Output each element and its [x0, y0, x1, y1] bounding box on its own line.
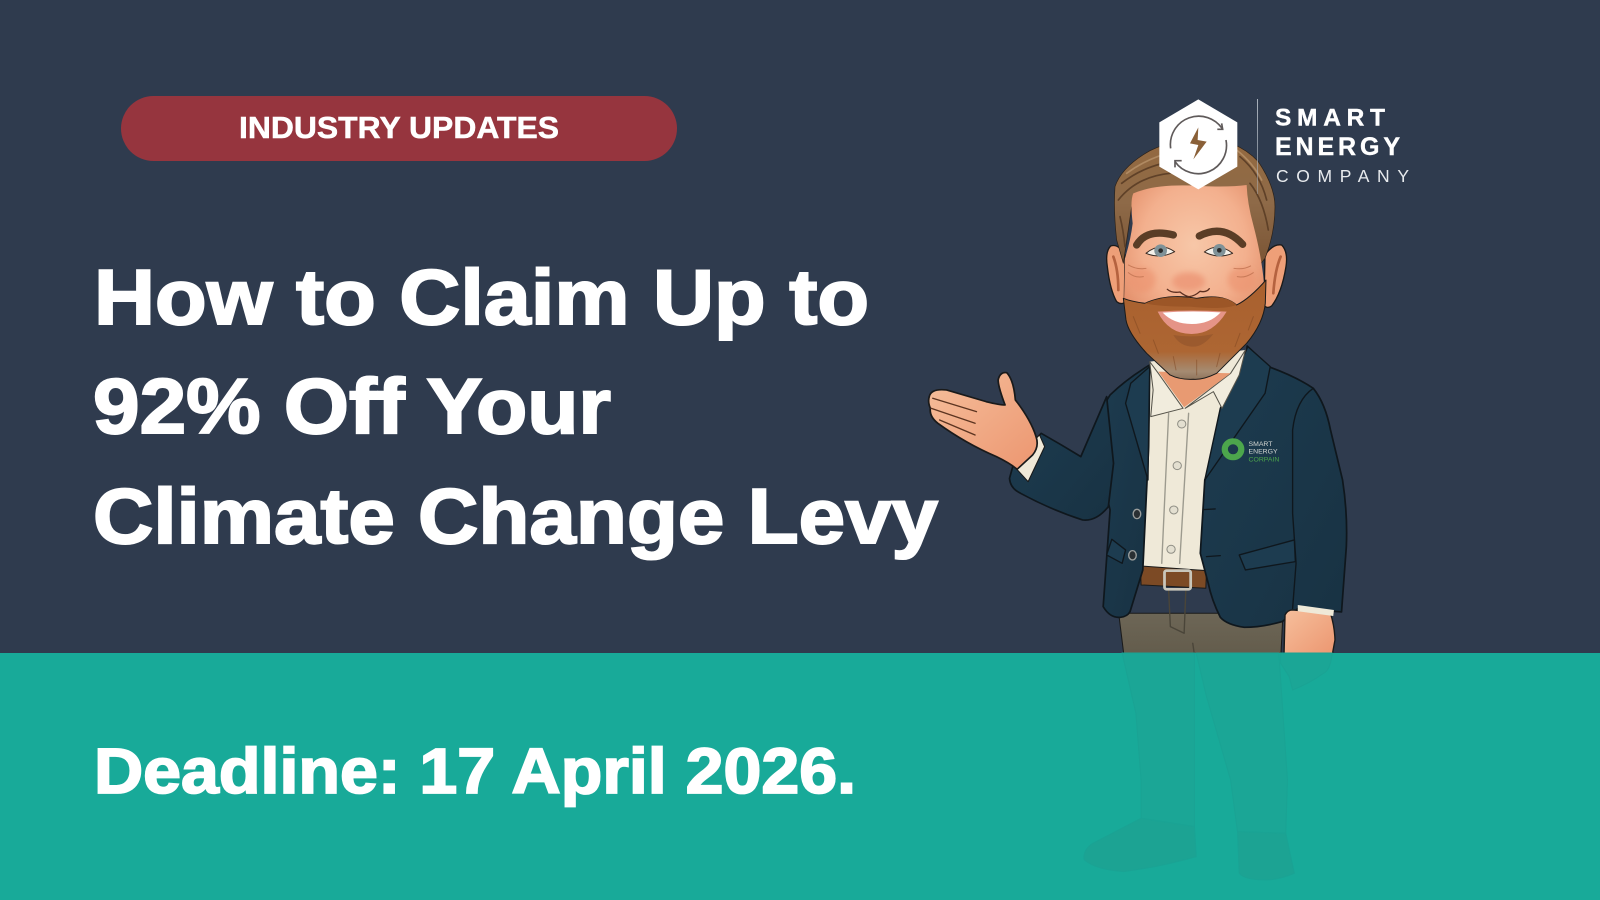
eyes	[1146, 244, 1233, 257]
logo divider	[1257, 99, 1258, 194]
jacket arm	[1010, 397, 1114, 520]
title: How to Claim Up to	[94, 253, 869, 341]
head	[1107, 138, 1287, 379]
ears	[1107, 245, 1287, 307]
jacket left panel	[1093, 365, 1150, 617]
jacket badge logo: ENERGY	[1249, 449, 1278, 456]
hair	[1114, 138, 1275, 267]
jacket badge logo: SMART	[1249, 441, 1272, 448]
title	[93, 253, 938, 560]
wrinkles	[1128, 265, 1253, 277]
neck	[1158, 372, 1231, 407]
nose line	[1167, 289, 1209, 297]
jacket badge logo	[1225, 441, 1279, 463]
bottom band	[0, 653, 1600, 900]
shirt	[1140, 350, 1245, 570]
jacket badge logo: CORPAIN	[1249, 456, 1279, 463]
logo wordmark: COMPANY	[1276, 166, 1409, 186]
collar	[1150, 350, 1245, 417]
logo wordmark: ENERGY	[1275, 133, 1400, 161]
faded legs and shoes	[1084, 653, 1332, 880]
character illustration	[929, 138, 1347, 655]
moustache	[1145, 297, 1237, 308]
jacket buttons	[1129, 509, 1141, 560]
category pill	[121, 96, 677, 161]
cheek blush and nose shading	[1128, 267, 1256, 293]
logo wordmark: SMART	[1275, 104, 1385, 132]
body	[929, 346, 1347, 655]
deadline text: Deadline: 17 April 2026.	[94, 735, 856, 807]
title: 92% Off Your	[93, 362, 611, 450]
mouth	[1158, 310, 1227, 334]
title: Climate Change Levy	[93, 472, 938, 560]
hand	[929, 373, 1037, 469]
lower hand	[1284, 610, 1335, 655]
trousers	[1119, 613, 1283, 655]
logo wordmark	[1275, 104, 1409, 186]
jacket pockets	[1107, 539, 1295, 570]
belt	[1140, 566, 1207, 589]
shirt buttons	[1167, 420, 1186, 553]
jacket right panel	[1200, 346, 1347, 627]
company logo	[1159, 99, 1409, 194]
lower cuff	[1298, 605, 1334, 616]
eyebrows	[1137, 231, 1243, 245]
face	[1124, 185, 1264, 343]
shirt cuff	[1012, 435, 1045, 482]
icon: hexagon energy mark	[1159, 99, 1237, 189]
chin patch	[1173, 334, 1213, 347]
beard	[1123, 280, 1266, 379]
category pill: INDUSTRY UPDATES	[239, 110, 559, 145]
